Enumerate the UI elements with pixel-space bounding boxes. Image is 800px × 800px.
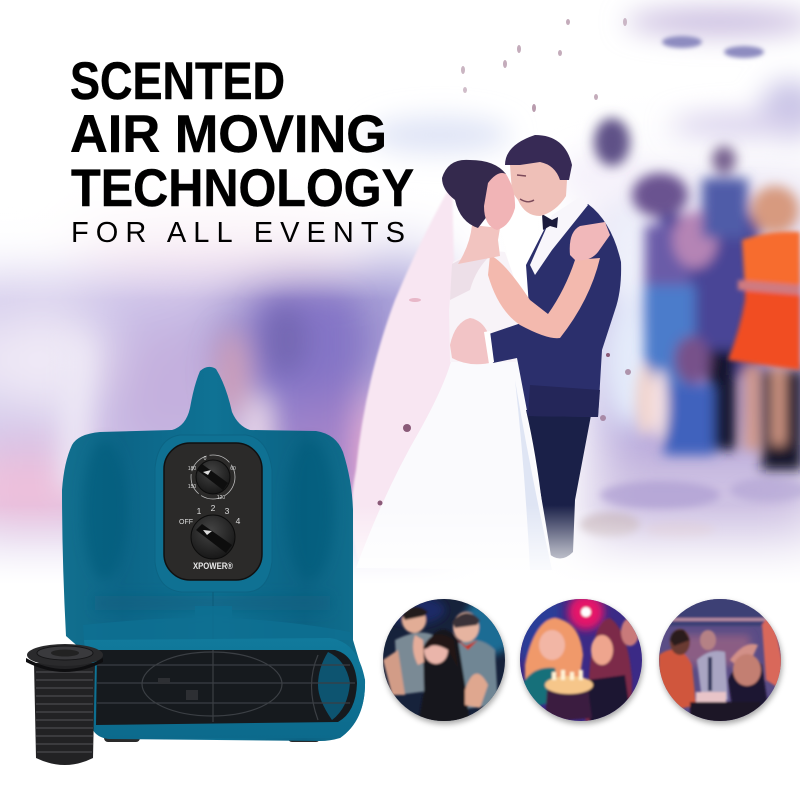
groom trousers — [526, 410, 592, 558]
timer knob — [196, 460, 230, 494]
speed labels: OFF — [179, 519, 193, 526]
bride face — [484, 173, 515, 230]
event photo: DJ party — [659, 596, 782, 727]
bottom white fade — [0, 505, 800, 585]
timer labels: 150 — [188, 484, 196, 490]
title line 3: TECHNOLOGY — [71, 159, 414, 218]
bride hair — [442, 160, 506, 228]
groom ear and smile — [517, 175, 534, 202]
bride arm — [488, 255, 600, 338]
groom cuff — [484, 331, 494, 364]
title — [70, 52, 414, 249]
bow tie — [542, 214, 558, 230]
timer dial ring — [191, 455, 235, 499]
timer labels — [188, 456, 236, 501]
speed labels: 3 — [225, 506, 230, 516]
confetti petals — [378, 18, 631, 506]
cartridge body — [34, 663, 95, 765]
event photo: party friends — [383, 595, 516, 725]
timer labels: 60 — [230, 466, 236, 472]
body shading — [83, 440, 334, 610]
scent cartridge — [26, 644, 103, 765]
floor — [580, 478, 800, 538]
speed labels: 1 — [197, 506, 202, 516]
couple: bride and groom — [351, 18, 631, 570]
groom head — [510, 150, 567, 216]
speed labels — [179, 503, 241, 526]
fan housing — [62, 367, 365, 741]
speed labels: 2 — [211, 503, 216, 513]
control panel — [164, 443, 262, 580]
bride veil — [351, 183, 470, 560]
centre seam — [212, 592, 214, 640]
title line 1: SCENTED — [70, 52, 285, 111]
groom shirt collar — [530, 197, 588, 275]
bride skirt — [356, 358, 553, 570]
bride neck and shoulders — [458, 225, 500, 264]
bride hand on shoulder — [570, 222, 610, 260]
groom hair — [505, 135, 572, 180]
title line 2: AIR MOVING — [70, 105, 387, 164]
blurred wedding guests — [560, 118, 800, 538]
ceiling — [370, 8, 800, 153]
groom hand on waist — [450, 318, 494, 364]
speed knob — [191, 515, 235, 559]
feet — [104, 732, 320, 742]
orange dress — [728, 232, 800, 370]
timer labels: 180 — [188, 466, 196, 472]
timer labels: 0 — [204, 456, 207, 462]
air mover fan — [62, 367, 365, 742]
bride bodice — [449, 251, 522, 362]
lower body ridge — [83, 606, 352, 640]
ceiling lights — [662, 36, 764, 58]
timer labels: 120 — [217, 495, 225, 501]
speed labels: 4 — [236, 516, 241, 526]
nozzle opening with grille — [96, 650, 357, 725]
groom jacket — [486, 204, 621, 417]
panel surround — [155, 435, 272, 592]
brand logo: XPOWER® — [193, 561, 233, 572]
nozzle lip — [84, 638, 365, 739]
cartridge cap — [27, 644, 103, 666]
cartridge slats — [36, 672, 93, 752]
subtitle: FOR ALL EVENTS — [71, 217, 405, 249]
event photo: birthday cake — [519, 594, 642, 725]
